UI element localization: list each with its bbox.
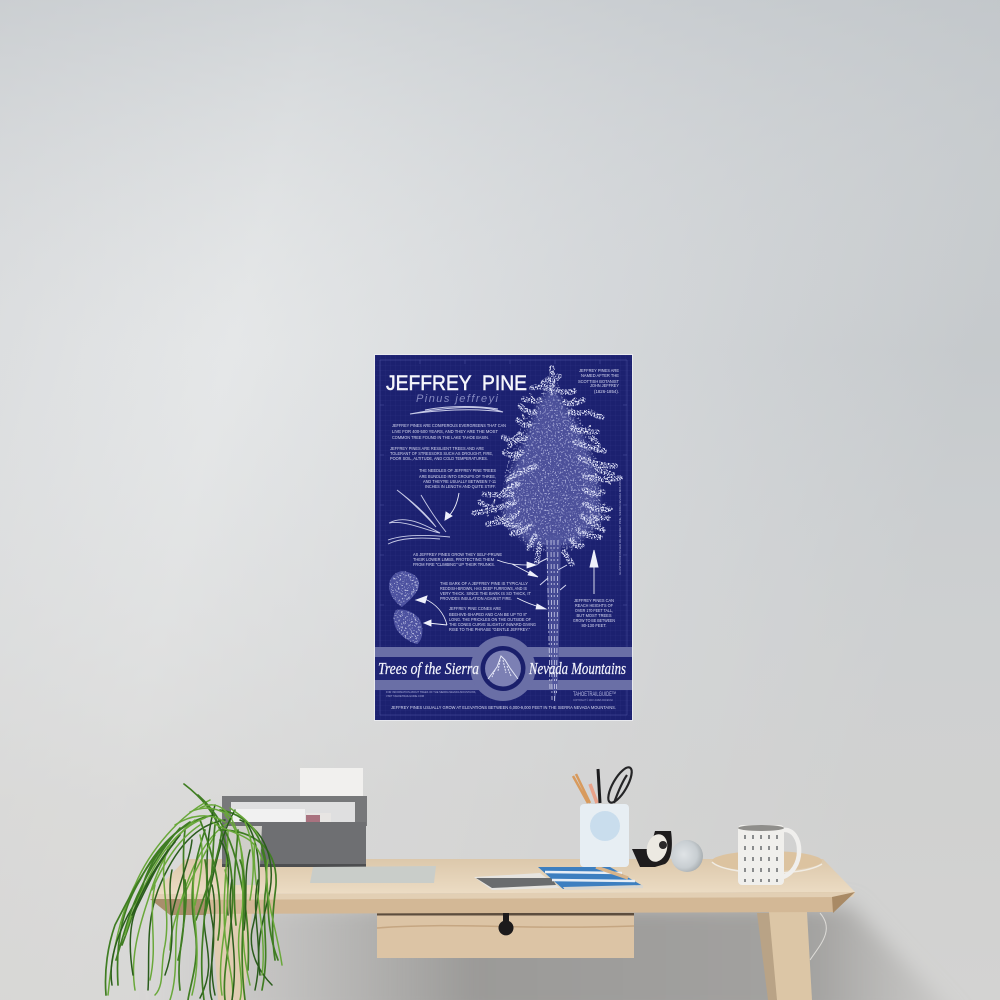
pen cup <box>573 764 636 867</box>
text: cones: JEFFREY PINE CONES ARE <box>449 606 501 611</box>
text: needles: INCHES IN LENGTH AND QUITE STIFF. <box>425 484 496 489</box>
text: needles: ARE BUNDLED INTO GROUPS OF THREE, <box>419 474 496 479</box>
trunk bark lines <box>547 540 558 702</box>
banner: light stripes and roundel <box>375 636 632 701</box>
text: height: OVER 170 FEET TALL, <box>575 608 613 613</box>
small print <box>386 690 476 698</box>
text: name origin: JEFFREY PINES ARE <box>579 368 619 373</box>
icon: mountain in roundel <box>488 656 518 679</box>
text: height: GROW TO BE BETWEEN <box>573 618 615 623</box>
text: needles <box>419 468 496 489</box>
tree branches <box>474 368 620 564</box>
text: intro <box>392 423 506 440</box>
text: height: BUT MOST TREES <box>576 613 612 618</box>
text: bark: REDDISH-BROWN, HAS DEEP FURROWS, AND IS <box>440 586 527 591</box>
arrow: needles <box>445 493 459 520</box>
text: resilience <box>390 446 493 461</box>
back wire and rear leg <box>757 913 826 1000</box>
text: self-pruning <box>413 552 502 567</box>
text: resilience: TOLERANT OF STRESSORS SUCH AS DROUGHT, FIRE, <box>390 451 493 456</box>
text: height: 80-130 FEET. <box>582 623 606 628</box>
drawer <box>377 913 634 958</box>
title: JEFFREY PINE <box>386 372 527 395</box>
tree trunk <box>546 535 561 703</box>
banner script left: Trees of the Sierra <box>378 659 479 678</box>
tree <box>474 368 620 703</box>
banner script right: Nevada Mountains <box>528 659 626 678</box>
left desk leg <box>212 912 252 1000</box>
tree canopy speckle <box>500 372 602 552</box>
pot <box>226 826 262 885</box>
text: cones <box>449 606 536 632</box>
text: name origin: (1826-1854). <box>594 389 619 394</box>
text: needles: THE NEEDLES OF JEFFREY PINE TREES <box>419 468 496 473</box>
pruned stubs <box>538 558 567 590</box>
icon: cone lower <box>394 609 422 644</box>
text: self-pruning: FROM FIRE "CLIMBING" UP THEIR TRUNKS. <box>413 562 495 567</box>
brand: TAHOETRAILGUIDE™ <box>573 691 616 698</box>
text: bark: PROVIDES INSULATION AGAINST FIRE. <box>440 596 512 601</box>
text: height: REACH HEIGHTS OF <box>575 603 613 608</box>
text: bark: VERY THICK. SINCE THE BARK IS SO THICK, IT <box>440 591 531 596</box>
icon: cone upper <box>389 571 419 607</box>
plant <box>105 784 282 1000</box>
drawer pull <box>499 913 514 935</box>
text: cones: BEEHIVE-SHAPED AND CAN BE UP TO 8" <box>449 612 527 617</box>
needle flourish <box>410 406 503 414</box>
mug <box>738 825 799 885</box>
text: name origin: SCOTTISH BOTANIST <box>578 379 619 384</box>
text: elevation: JEFFREY PINES USUALLY GROW AT ELEVATIONS BETWEEN 6,000-9,000 FEET IN THE SIERRA NEVADA MOUNTAINS. <box>391 705 616 710</box>
glass orb <box>671 840 703 872</box>
brand: COPYRIGHT © 2018 JAMES MCKENNA <box>573 698 613 702</box>
text: self-pruning: THEIR LOWER LIMBS, PROTECTING THEM <box>413 557 494 562</box>
wooden tray <box>712 851 822 873</box>
arrow: bark <box>517 598 546 609</box>
notebook and card <box>474 867 643 890</box>
text: self-pruning: AS JEFFREY PINES GROW THEY SELF-PRUNE <box>413 552 502 557</box>
tape dispenser <box>632 831 672 867</box>
text: bark <box>440 581 531 601</box>
desk front edge <box>150 892 855 914</box>
text: cones: THE CONES CURVE SLIGHTLY INWARD GIVING <box>449 622 536 627</box>
small print: FOR INFORMATION ABOUT TREES OF THE SIERRA NEVADA MOUNTAINS, <box>386 690 476 694</box>
desk top <box>152 859 855 894</box>
text: bark: THE BARK OF A JEFFREY PINE IS TYPICALLY <box>440 581 528 586</box>
text: intro: COMMON TREE FOUND IN THE LAKE TAHOE BASIN. <box>392 435 489 440</box>
desk <box>150 859 855 915</box>
text: cones: LONG. THE PRICKLES ON THE OUTSIDE OF <box>449 617 531 622</box>
booklet on desk <box>310 866 436 883</box>
text: intro: LIVE FOR 400-500 YEARS, AND THEY ARE THE MOST <box>392 429 498 434</box>
text: name origin: JOHN JEFFREY <box>590 383 619 388</box>
subtitle: Pinus jeffreyi <box>416 393 499 405</box>
arrow: height <box>590 550 598 594</box>
text: resilience: POOR SOIL, ALTITUDE, AND COLD TEMPERATURES. <box>390 456 488 461</box>
icon: needle bundles <box>388 490 450 544</box>
text: cones: RISE TO THE PHRASE "GENTLE JEFFREY." <box>449 627 530 632</box>
arrows: self-pruning <box>497 560 538 577</box>
text: name origin <box>578 368 619 394</box>
brand <box>573 691 616 702</box>
right desk leg <box>769 912 812 1000</box>
text: needles: AND THEY'RE USUALLY BETWEEN 7-11 <box>423 479 496 484</box>
text: height: JEFFREY PINES CAN <box>574 598 614 603</box>
desk organizer <box>222 768 367 867</box>
text: resilience: JEFFREY PINES ARE RESILIENT TREES AND ARE <box>390 446 484 451</box>
pencil <box>596 867 628 878</box>
text: name origin: NAMED AFTER THE <box>581 373 619 378</box>
tree canopy haze <box>503 385 600 545</box>
poster <box>374 354 633 721</box>
text: height <box>573 598 615 628</box>
vertical credit: ILLUSTRATION BASED ON JEFFREY PINE, SIERRA NEVADA MOUNTAINS <box>618 475 622 575</box>
text: intro: JEFFREY PINES ARE CONIFEROUS EVERGREENS THAT CAN <box>392 423 506 428</box>
scissors <box>604 764 636 806</box>
arrows: cones <box>416 596 447 626</box>
small print: VISIT TAHOETRAILGUIDE.COM <box>386 694 425 698</box>
